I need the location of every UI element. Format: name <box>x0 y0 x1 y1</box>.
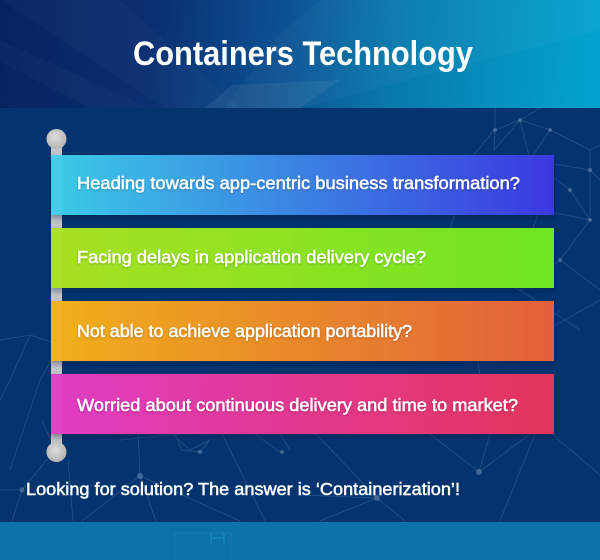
banner 4 <box>51 374 554 434</box>
banner 4 text: Worried about continuous delivery and time to market? <box>77 395 518 415</box>
banner 2 text: Facing delays in application delivery cycle? <box>77 247 426 267</box>
banner 3 <box>51 301 554 361</box>
title: Containers Technology <box>133 35 473 73</box>
banner 3 text: Not able to achieve application portability? <box>77 321 412 341</box>
conclusion text: Looking for solution? The answer is ‘Containerization’! <box>26 479 460 499</box>
faint container icon <box>175 533 231 560</box>
network nodes <box>20 118 592 501</box>
banner 2 <box>51 228 554 288</box>
header diagonal light shapes <box>0 0 600 108</box>
bottom ball <box>46 442 66 462</box>
banner 1 text: Heading towards app-centric business transformation? <box>77 173 520 193</box>
flagpole <box>46 129 66 462</box>
top ball <box>46 129 66 149</box>
banner 1 <box>51 155 554 215</box>
bottom band <box>0 522 600 560</box>
network pattern background <box>0 108 600 521</box>
header band <box>0 0 600 108</box>
